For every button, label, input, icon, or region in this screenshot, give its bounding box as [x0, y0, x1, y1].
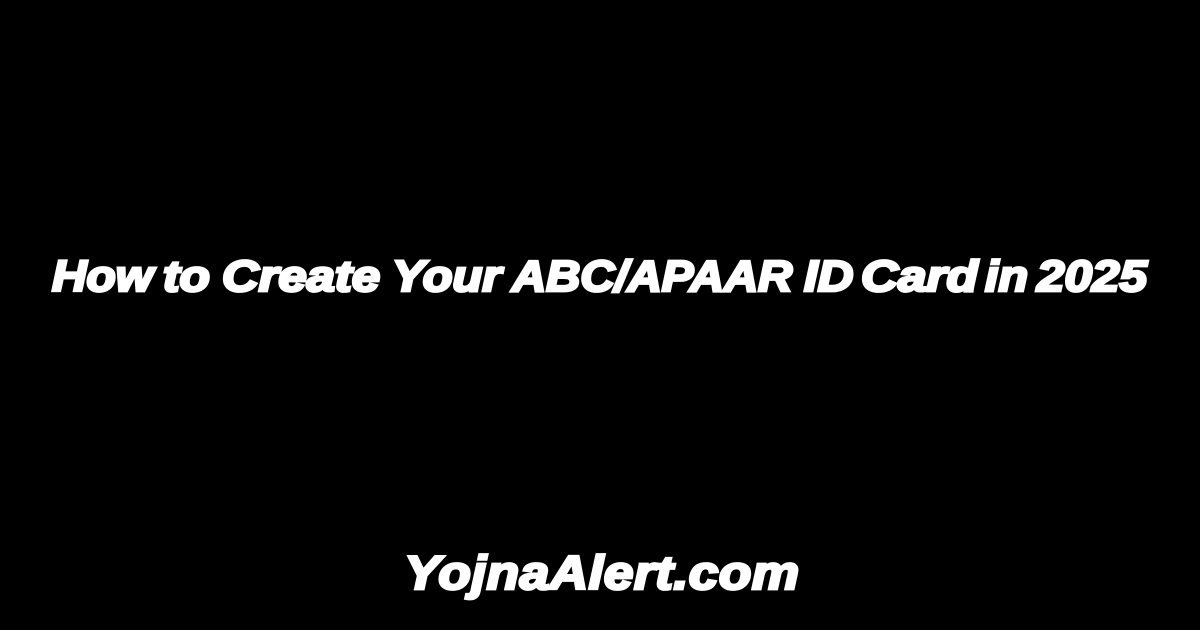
title: Create: [222, 252, 380, 301]
title: ID: [804, 252, 853, 301]
title: Your: [392, 252, 501, 301]
title: to: [163, 252, 210, 301]
title: [51, 252, 1150, 301]
title: 2025: [1037, 252, 1147, 301]
title: ABC/APAAR: [512, 252, 792, 301]
title: in: [985, 252, 1028, 301]
title: How: [52, 252, 153, 301]
site name: YojnaAlert.com: [404, 547, 800, 600]
title: Card: [861, 252, 978, 301]
